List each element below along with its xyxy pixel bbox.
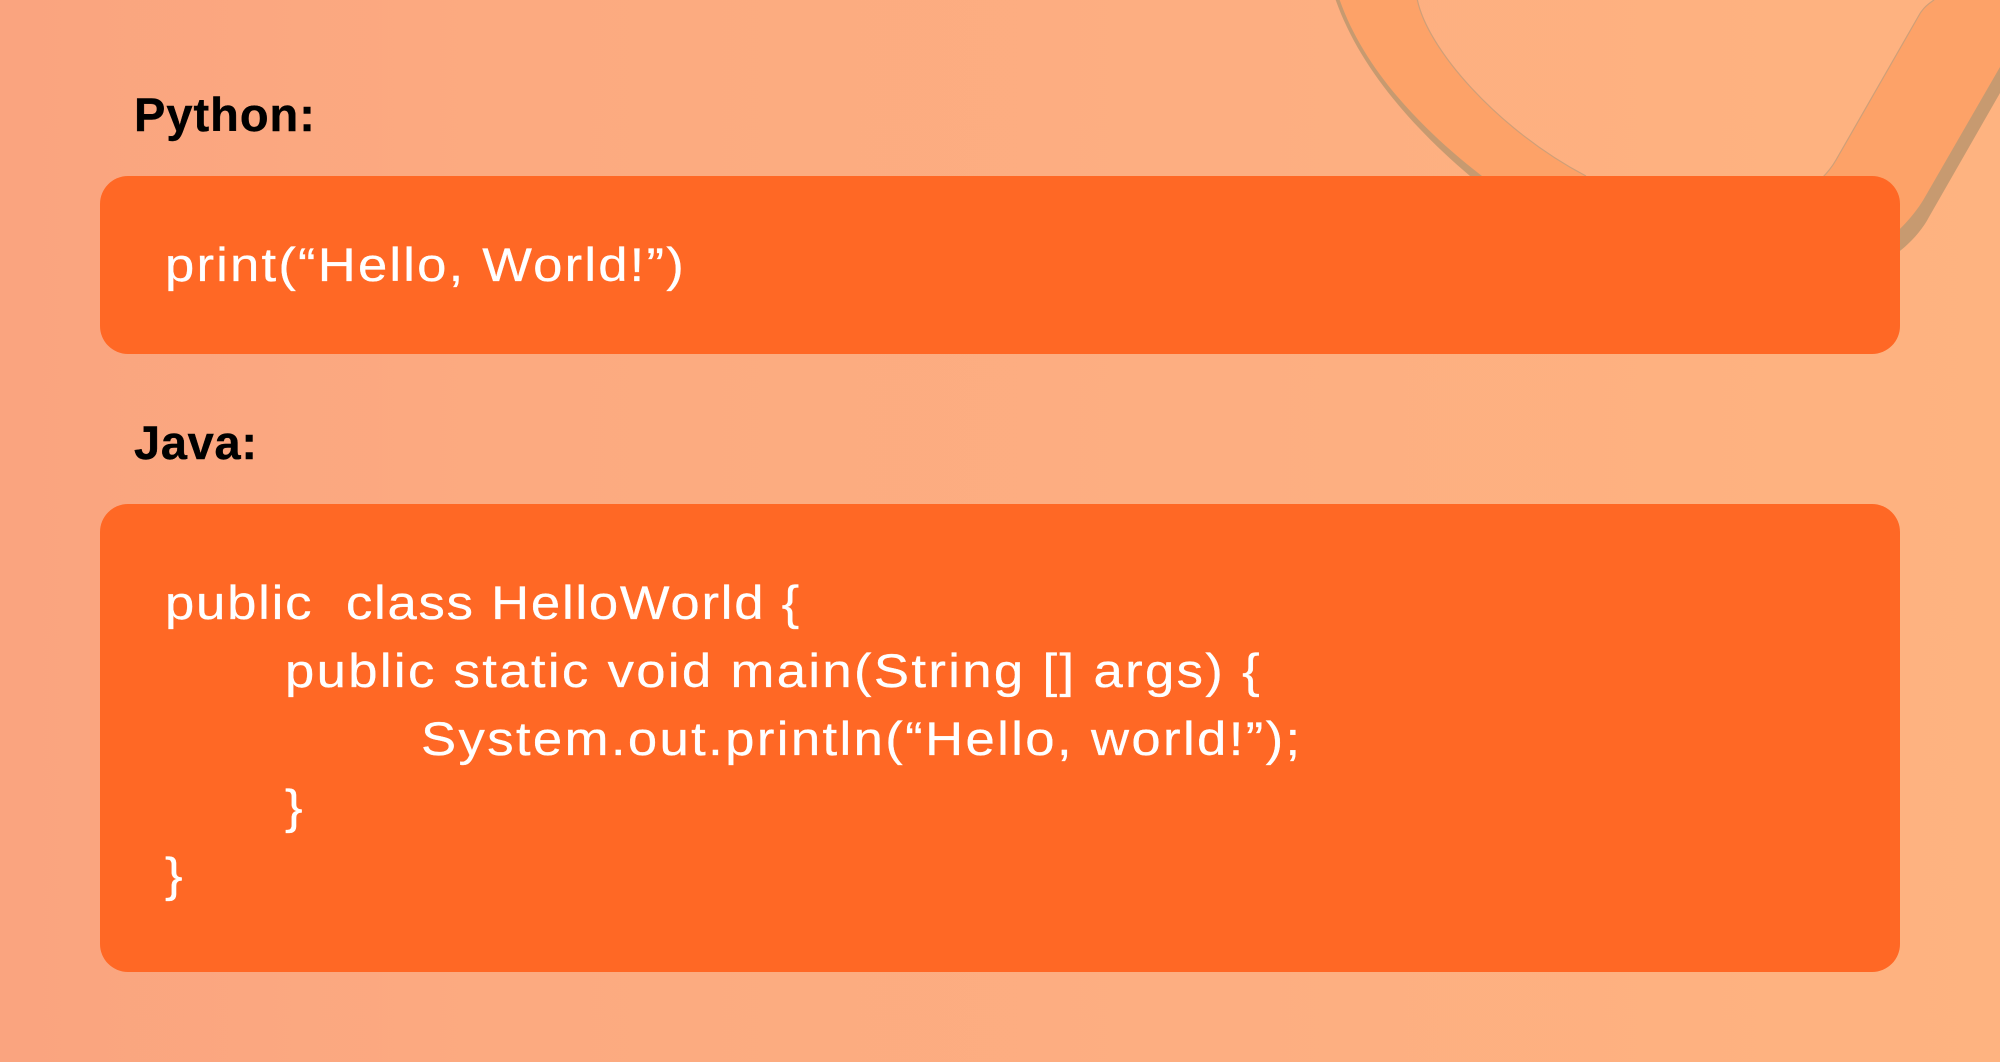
code: Python hello world: print(“Hello, World!”) (165, 238, 686, 291)
left handle arc (1335, 0, 1596, 182)
heading: Python: Python: (134, 88, 316, 141)
right handle arc (1820, 0, 2000, 262)
panel: Python code (100, 176, 1900, 354)
code: Java line 3: System.out.println(“Hello, world!”); (421, 712, 1303, 765)
code: Java line 1: public class HelloWorld { (165, 576, 801, 629)
code: Java line 5: } (165, 848, 183, 901)
code: Java line 4: } (285, 780, 303, 833)
code: Java line 2: public static void main(String [] args) { (285, 644, 1262, 697)
heading: Java: Java: (134, 416, 258, 469)
decorative handle shape (1336, 0, 2000, 251)
panel: Java code (100, 504, 1900, 972)
